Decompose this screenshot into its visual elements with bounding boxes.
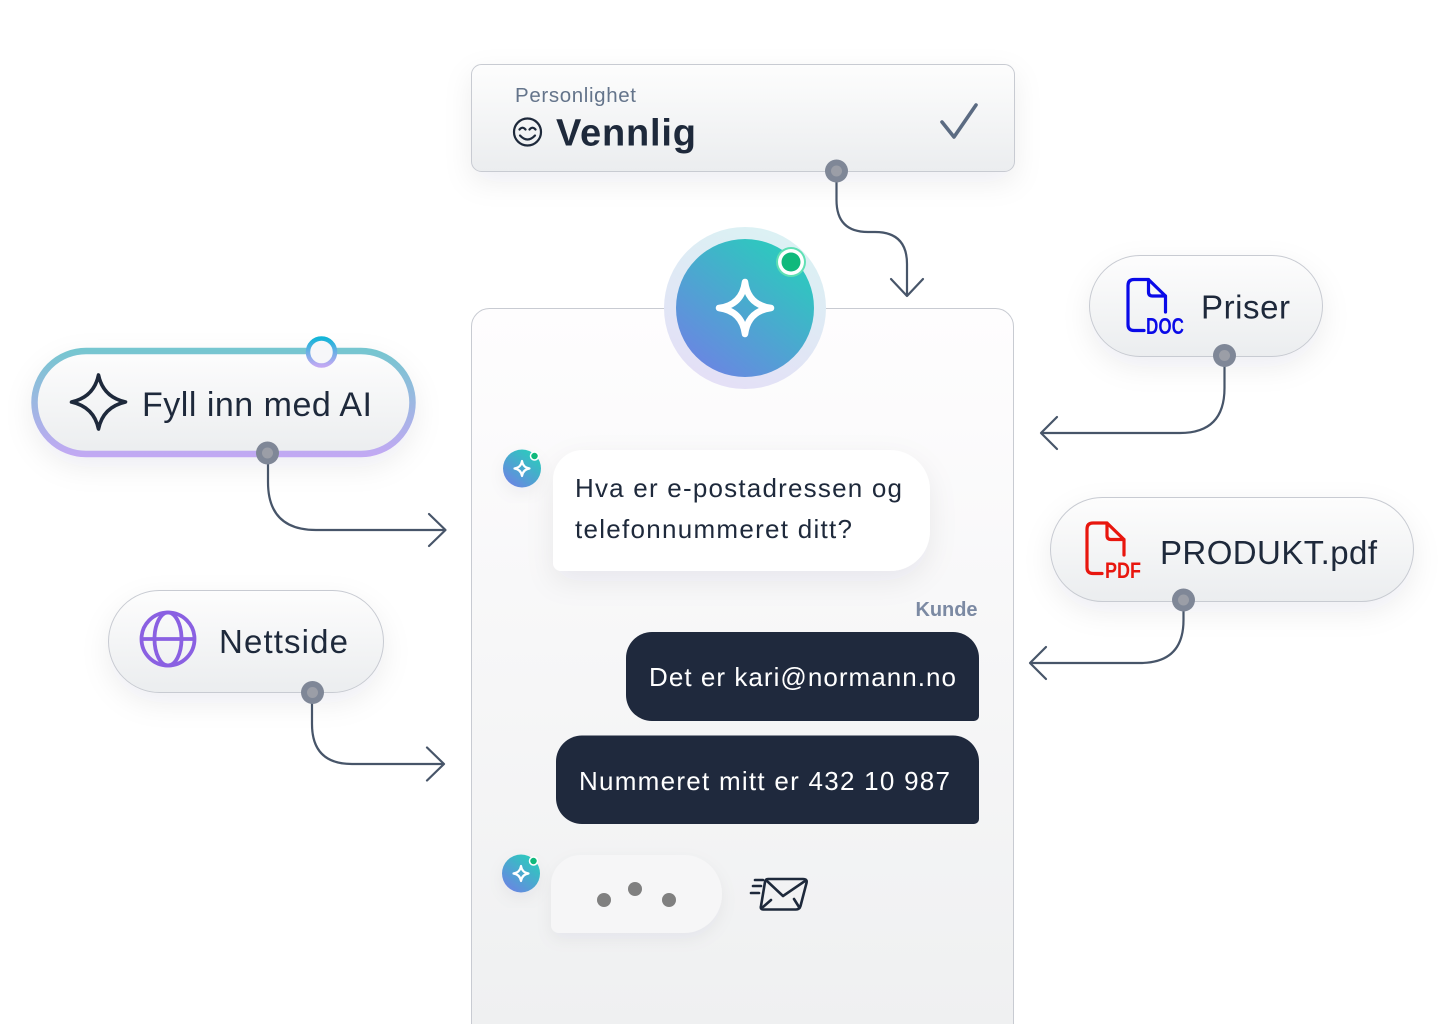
icon: globe [142,612,194,666]
label: Nettside: Nettside [219,623,348,660]
chat bubble: customer phone: Nummeret mitt er 432 10 987 [579,766,950,796]
icon: sparkle [72,375,126,429]
icon: DOC file: DOC [1146,313,1184,339]
icon: PDF file: PDF [1105,558,1141,583]
arrow: prices to chat [1041,344,1236,449]
label: PRODUKT.pdf: PRODUKT.pdf [1160,534,1378,571]
pill: PRODUKT.pdf [1050,498,1414,602]
chat bubble: customer email: Det er kari@normann.no [649,662,956,692]
label: Fyll inn med AI: Fyll inn med AI [142,386,372,424]
label: Kunde: Kunde [916,599,978,621]
pill: Priser [1090,256,1322,356]
panel: personality selector [472,64,1014,172]
icon: assistant avatar, typing [502,854,540,892]
toggle knob [308,338,335,366]
chat bubble: typing indicator [551,855,722,933]
icon: assistant avatar, question [503,450,541,488]
heading: Vennlig: Vennlig [556,112,696,154]
status indicator [776,247,806,277]
pill: Fyll inn med AI [34,338,412,454]
icon: AI avatar [664,227,826,389]
icon: DOC file [1128,280,1184,339]
arrow: website to chat [301,681,444,780]
question text: Hva er e-postadressen og [575,473,902,503]
panel: chat window [472,308,1014,1024]
icon: sending envelope [751,879,807,910]
icon: check mark [942,105,976,137]
typing dots [597,882,676,907]
label: Priser: Priser [1201,288,1290,326]
arrow: pdf to chat [1030,588,1195,679]
chat bubble: customer email [626,632,979,721]
arrow: personality to chat [825,160,923,296]
question text [575,473,902,544]
arrow: AI fill to chat [256,442,446,546]
chat bubble: assistant question [553,450,930,571]
question text: telefonnummeret ditt? [575,514,852,544]
icon: smiling face [514,118,541,146]
label: Personlighet: Personlighet [515,84,636,107]
icon: PDF file [1087,523,1141,583]
chat bubble: customer phone [556,736,979,824]
pill: Nettside [108,590,384,692]
